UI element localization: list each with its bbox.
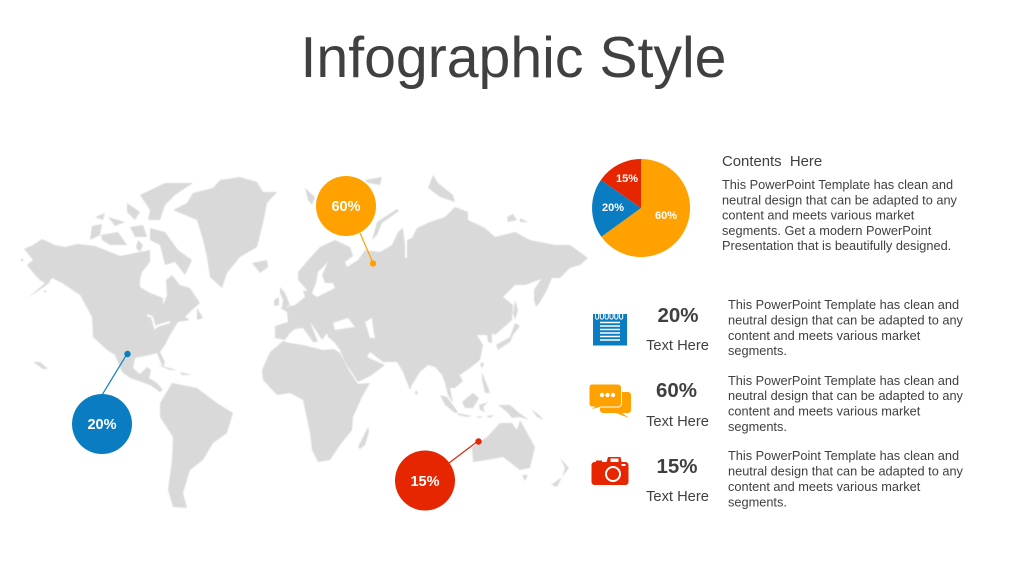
callout: 15% Australia: 15% <box>410 474 440 490</box>
Indonesia and New Guinea <box>440 393 544 420</box>
Eurasia <box>275 207 588 403</box>
Tasmania and New Zealand <box>522 458 569 487</box>
icon: chat bubbles <box>589 384 631 418</box>
text block: 20%: content and meets various market <box>728 328 921 343</box>
Japan and East Asia islands <box>415 300 520 395</box>
stat: 15% <box>646 455 709 505</box>
pie chart: 60% <box>655 210 677 222</box>
pie chart: 20% <box>602 202 624 214</box>
pie chart: 15% <box>616 173 638 185</box>
Greenland <box>173 177 277 288</box>
stat: 20% <box>646 304 709 354</box>
stat: 20%: 20% <box>657 304 699 327</box>
text block: contents: This PowerPoint Template has clean and <box>722 177 953 192</box>
callout: 60% Russia: 60% <box>331 199 361 215</box>
text block: 20%: segments. <box>728 343 787 358</box>
text block: 60%: content and meets various market <box>728 404 921 418</box>
text block: 60%: neutral design that can be adapted to any <box>728 388 964 403</box>
stat: 60%: Text Here <box>646 414 709 430</box>
callout: 20% North America: 20% <box>87 417 117 433</box>
stat: 15%: Text Here <box>646 489 709 505</box>
Canadian Arctic islands <box>20 183 203 375</box>
text block: 20%: This PowerPoint Template has clean and <box>728 297 959 312</box>
callout: 15% Australia <box>395 438 482 510</box>
Australia <box>472 420 535 470</box>
pie chart <box>592 159 690 257</box>
Black Sea and Caspian Sea <box>333 318 375 338</box>
text block: 20%: neutral design that can be adapted to any <box>728 312 964 328</box>
heading: contents: Contents Here <box>722 154 822 170</box>
callout: 20% North America <box>72 351 132 454</box>
text block: contents: Presentation that is beautifully designed. <box>722 238 951 253</box>
text block: contents: content and meets various market <box>722 208 915 222</box>
text block: 15%: content and meets various market <box>728 479 921 494</box>
Arctic Russia islands <box>305 175 528 240</box>
text block: 60%: segments. <box>728 419 787 434</box>
text block: contents: neutral design that can be adapted to any <box>722 192 958 208</box>
Baja gulf <box>107 351 115 365</box>
text block: 60%: This PowerPoint Template has clean and <box>728 373 959 388</box>
stat: 60%: 60% <box>656 379 697 402</box>
UK and Ireland <box>274 287 290 308</box>
text block: 15%: This PowerPoint Template has clean and <box>728 448 959 463</box>
icon: camera <box>592 457 628 485</box>
North America <box>24 239 200 392</box>
text block: 15%: neutral design that can be adapted to any <box>728 464 964 478</box>
Great Lakes <box>147 315 170 328</box>
text block: 15%: segments. <box>728 494 787 510</box>
stat: 15%: 15% <box>656 455 698 478</box>
Iceland <box>252 260 268 273</box>
text block: contents: segments. Get a modern PowerPoint <box>722 223 932 238</box>
Madagascar <box>358 427 369 449</box>
Africa <box>262 341 370 462</box>
South America <box>160 383 233 508</box>
title: Infographic Style <box>301 26 726 90</box>
icon: notepad <box>593 313 627 346</box>
stat: 60% <box>646 379 709 430</box>
callout: 60% Russia <box>316 176 376 267</box>
stat: 20%: Text Here <box>646 338 709 354</box>
world map <box>20 175 588 508</box>
